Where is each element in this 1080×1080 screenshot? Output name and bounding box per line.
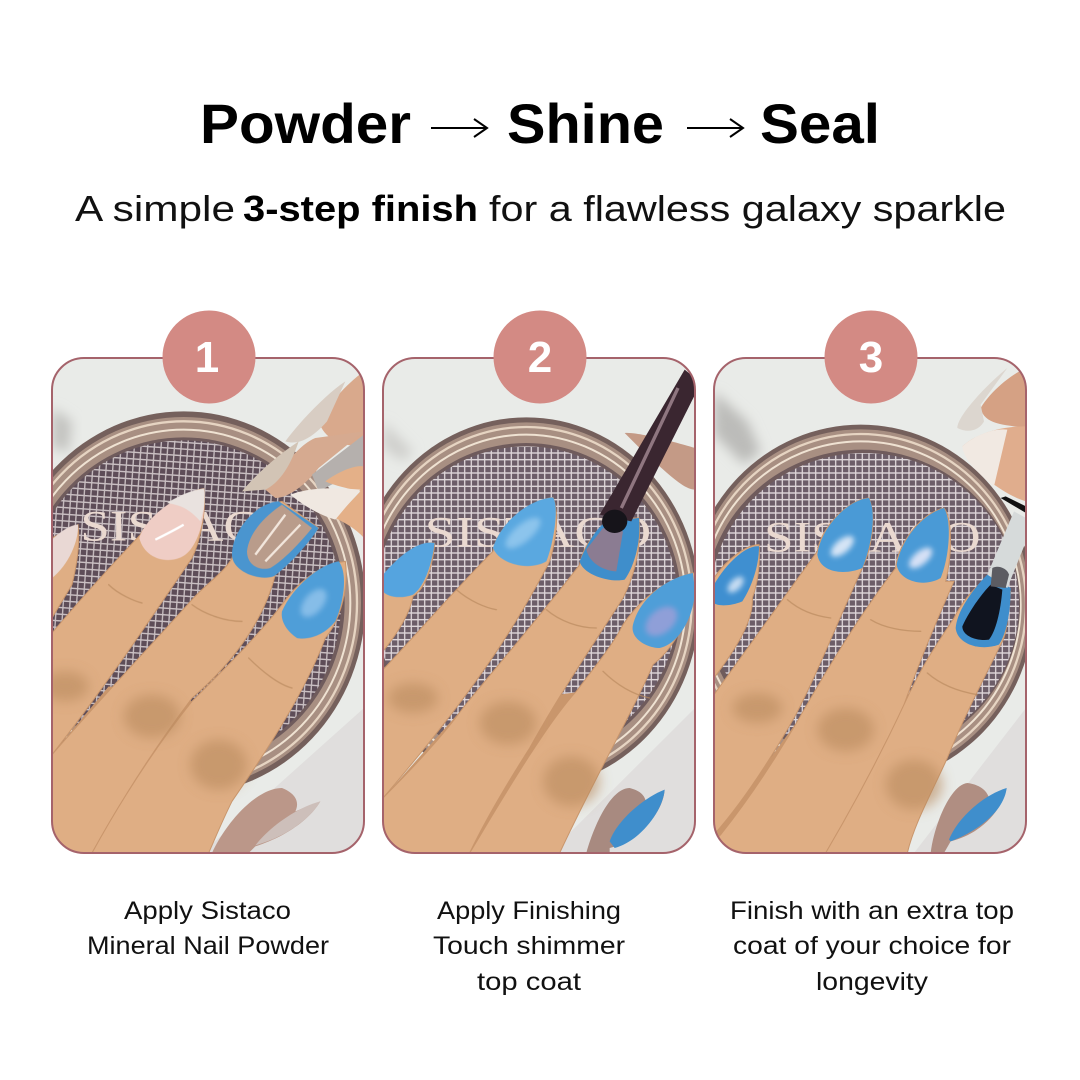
step 3 number badge: 3 bbox=[859, 333, 883, 382]
caption: step 3: longevity bbox=[816, 968, 929, 996]
caption: step 3 bbox=[730, 897, 1014, 996]
step 2 border bbox=[383, 358, 695, 853]
lower hand bbox=[212, 788, 320, 853]
caption: step 1: Mineral Nail Powder bbox=[87, 932, 329, 960]
lower hand bbox=[931, 783, 1007, 853]
brush and hand bbox=[957, 368, 1026, 588]
subtitle: 3-step finish bbox=[243, 188, 478, 229]
applicator hand bbox=[242, 371, 364, 538]
caption: step 3: coat of your choice for bbox=[733, 932, 1011, 960]
powder tin bbox=[384, 417, 694, 770]
subtitle bbox=[75, 188, 1006, 229]
fingers bbox=[714, 498, 1011, 853]
caption: step 3: Finish with an extra top bbox=[730, 897, 1014, 925]
caption: step 1: Apply Sistaco bbox=[124, 897, 291, 925]
powder tin: SISTACO bbox=[80, 502, 297, 550]
title bbox=[200, 92, 880, 155]
knuckles and creases bbox=[388, 590, 650, 806]
title: Powder bbox=[200, 92, 411, 155]
powder tin bbox=[53, 411, 363, 784]
fingers bbox=[52, 489, 346, 853]
caption: step 2 bbox=[433, 897, 625, 996]
brush and hand bbox=[600, 370, 695, 533]
subtitle: for a flawless galaxy sparkle bbox=[489, 188, 1006, 229]
panel: step 2 photo bbox=[353, 358, 700, 853]
step 2 number badge: 2 bbox=[528, 333, 552, 382]
knuckles and creases bbox=[732, 600, 977, 810]
caption: step 2: Apply Finishing bbox=[437, 897, 621, 925]
caption: step 1 bbox=[87, 897, 329, 960]
step 3 border bbox=[714, 358, 1026, 853]
nails bbox=[714, 498, 1011, 647]
powder tin bbox=[715, 424, 1025, 761]
nails bbox=[52, 489, 344, 639]
subtitle: A simple bbox=[75, 188, 235, 229]
panel: step 3 photo bbox=[687, 358, 1034, 853]
step 2 number badge bbox=[494, 310, 586, 404]
lower hand bbox=[586, 788, 665, 853]
caption: step 2: top coat bbox=[477, 968, 581, 996]
title: Seal bbox=[760, 92, 880, 155]
fingers bbox=[383, 497, 695, 853]
powder tin: SISTACO bbox=[764, 513, 981, 561]
step 1 number badge: 1 bbox=[195, 333, 219, 382]
title: Shine bbox=[507, 92, 664, 155]
nails bbox=[383, 497, 695, 648]
caption: step 2: Touch shimmer bbox=[433, 932, 625, 960]
step 1 number badge bbox=[162, 310, 256, 404]
panel: step 1 photo bbox=[2, 358, 365, 853]
knuckles and creases bbox=[42, 585, 292, 790]
arrow: shine to seal bbox=[687, 119, 743, 137]
step 3 number badge bbox=[824, 310, 918, 404]
powder tin: SISTACO bbox=[425, 508, 651, 556]
step 1 border bbox=[52, 358, 364, 853]
arrow: powder to shine bbox=[431, 119, 487, 137]
